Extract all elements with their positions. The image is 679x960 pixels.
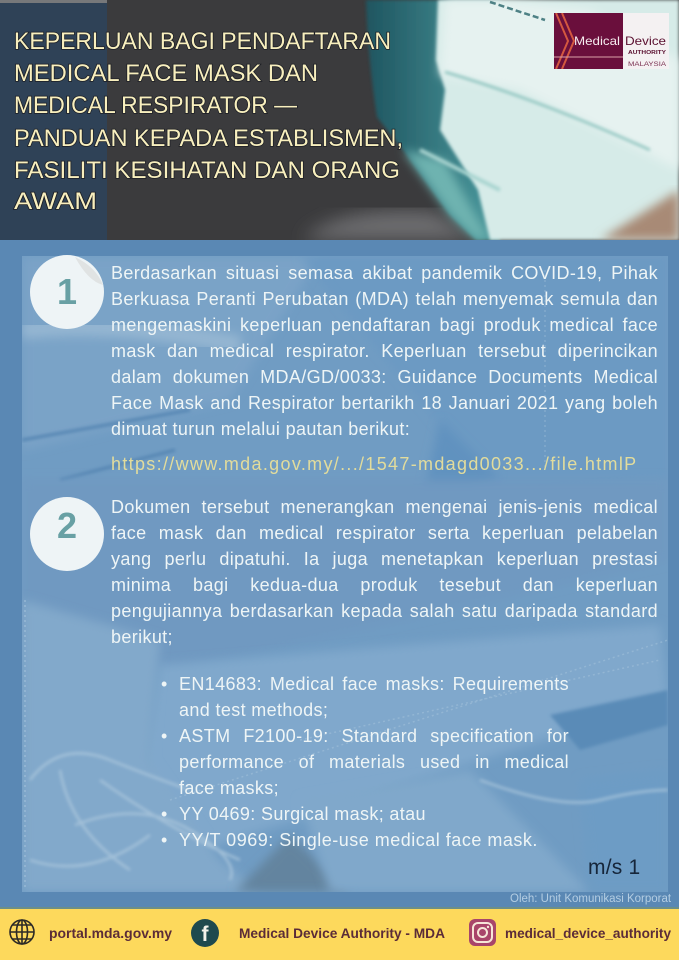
paragraph 1: dalam dokumen MDA/GD/0033: Guidance Documents Medical <box>111 367 658 387</box>
list of standards: ASTM F2100-19: Standard specification for <box>179 726 569 746</box>
paragraph 1: Face Mask and Respirator bertarikh 18 Januari 2021 yang boleh <box>111 393 658 413</box>
logo: Medical Device Authority: Device <box>625 34 666 48</box>
credit: Oleh: Unit Komunikasi Korporat <box>510 893 671 905</box>
list of standards: YY/T 0969: Single-use medical face mask. <box>179 830 538 850</box>
number badge 1: 1 <box>57 271 77 312</box>
list of standards: face masks; <box>179 778 279 798</box>
title: AWAM <box>14 188 97 215</box>
icon: globe <box>10 920 34 944</box>
title: PANDUAN KEPADA ESTABLISMEN, <box>14 125 403 152</box>
paragraph 2: berikut; <box>111 627 173 647</box>
page marker: m/s 1 <box>588 856 640 879</box>
list of standards: EN14683: Medical face masks: Requirements <box>179 674 569 694</box>
paragraph 1: mask dan medical respirator. Keperluan tersebut diperincikan <box>111 341 658 361</box>
header photo <box>0 0 679 240</box>
logo: Medical Device Authority <box>554 13 669 69</box>
paragraph 2: Dokumen tersebut menerangkan mengenai jenis-jenis medical <box>111 497 658 517</box>
number badge 2: 2 <box>57 505 77 546</box>
number badge 2 <box>30 497 104 571</box>
list of standards: performance of materials used in medical <box>179 752 569 772</box>
icon: instagram <box>469 919 496 946</box>
paragraph 1: mengemaskini keperluan pendaftaran bagi produk medical face <box>111 315 658 335</box>
title: MEDICAL FACE MASK DAN <box>14 60 318 87</box>
facebook name: Medical Device Authority - MDA <box>239 926 445 941</box>
title: KEPERLUAN BAGI PENDAFTARAN <box>14 28 391 55</box>
logo: Medical Device Authority: Medical <box>574 34 620 48</box>
title: FASILITI KESIHATAN DAN ORANG <box>14 157 400 184</box>
content panel image <box>22 256 668 892</box>
logo: Medical Device Authority: MALAYSIA <box>628 62 666 68</box>
icon: facebook <box>191 919 219 947</box>
paragraph 2: yang perlu dipatuhi. Ia juga menetapkan keperluan prestasi <box>111 549 658 569</box>
paragraph 1: Berdasarkan situasi semasa akibat pandemik COVID-19, Pihak <box>111 263 658 283</box>
website: portal.mda.gov.my <box>49 926 172 941</box>
paragraph 1: dimuat turun melalui pautan berikut: <box>111 419 410 439</box>
number badge 1 <box>30 255 104 329</box>
list of standards: YY 0469: Surgical mask; atau <box>179 804 426 824</box>
title <box>12 28 403 215</box>
link: https://www.mda.gov.my/.../1547-mdagd0033.../file.htmlP <box>111 454 637 474</box>
logo: Medical Device Authority: AUTHORITY <box>628 50 666 56</box>
list of standards: and test methods; <box>179 700 328 720</box>
list of standards: • <box>161 830 168 850</box>
footer band <box>0 907 679 909</box>
list of standards: • <box>161 674 168 694</box>
instagram handle: medical_device_authority <box>505 926 671 941</box>
paragraph 1 <box>111 263 658 439</box>
paragraph 1: Berkuasa Peranti Perubatan (MDA) telah menyemak semula dan <box>111 289 658 309</box>
footer contact bar <box>9 919 671 947</box>
icon: facebook: f <box>202 923 210 946</box>
paragraph 2: pengujiannya berdasarkan kepada salah satu daripada standard <box>111 601 658 621</box>
list of standards: • <box>161 804 168 824</box>
paragraph 2 <box>111 497 658 647</box>
paragraph 2: face mask dan medical respirator serta keperluan pelabelan <box>111 523 658 543</box>
title: MEDICAL RESPIRATOR — <box>14 92 297 119</box>
paragraph 2: minima bagi kedua-dua produk tesebut dan keperluan <box>111 575 658 595</box>
list of standards: • <box>161 726 168 746</box>
